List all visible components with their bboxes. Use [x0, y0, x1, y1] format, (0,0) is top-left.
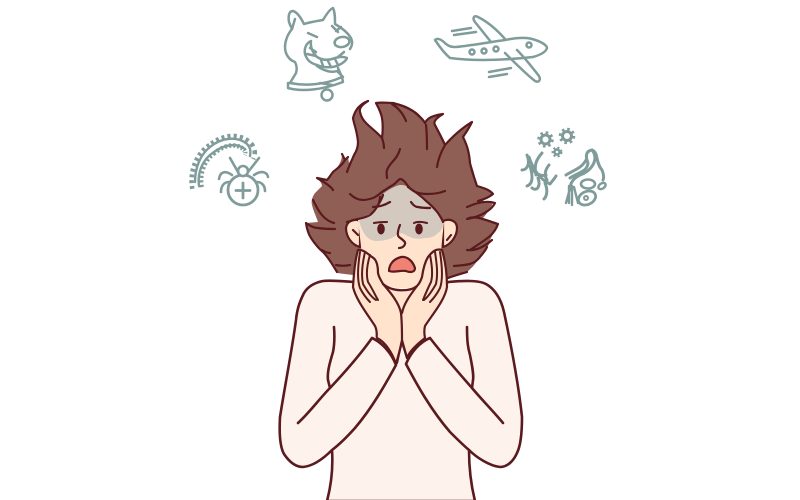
icon: germs and parasites	[522, 130, 607, 208]
ears	[346, 220, 457, 247]
hair	[306, 101, 498, 279]
hands	[353, 249, 447, 364]
body and sweater	[280, 281, 522, 500]
face shadow	[359, 185, 444, 241]
hair strands	[347, 101, 368, 172]
hairline and facial features	[350, 179, 445, 200]
icon: airplane	[435, 16, 547, 82]
sleeves	[298, 338, 503, 450]
icon: growling dog	[285, 8, 352, 100]
face	[347, 179, 445, 288]
mouth	[389, 257, 415, 272]
icon: centipede and tick	[195, 139, 268, 205]
